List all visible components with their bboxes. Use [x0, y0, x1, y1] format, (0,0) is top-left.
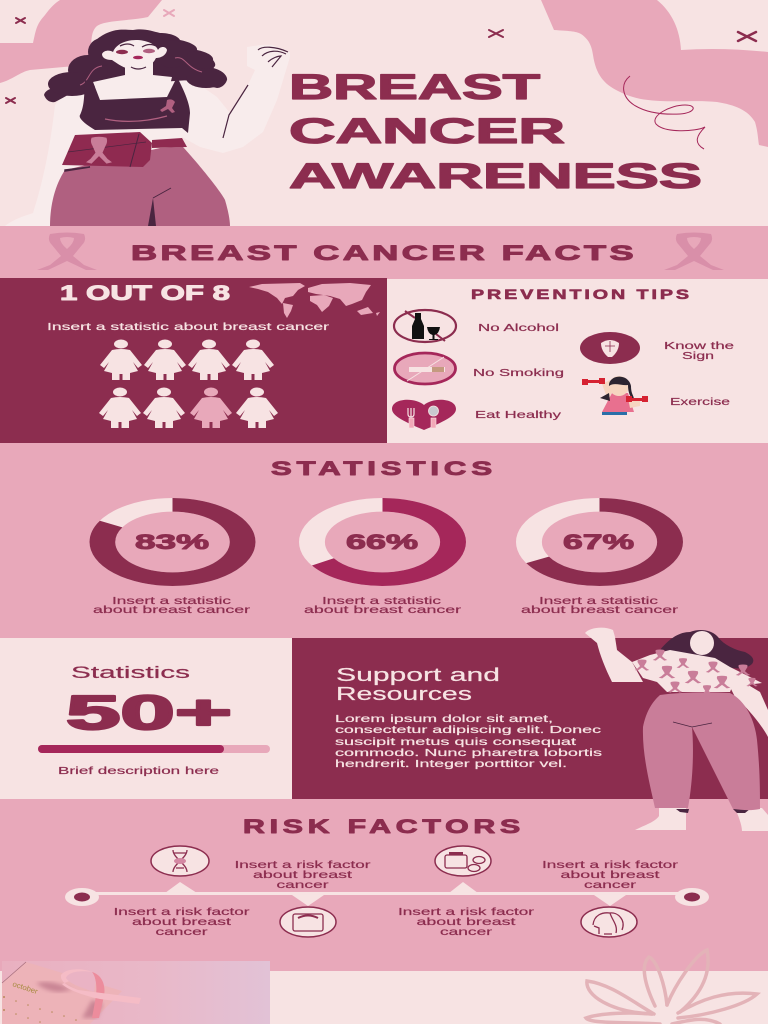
face — [690, 631, 714, 655]
icon: pills — [435, 846, 491, 876]
risk text 1 — [114, 906, 250, 938]
icon: scale — [280, 907, 336, 937]
caption: about breast cancer — [93, 604, 251, 616]
body — [5, 45, 290, 226]
risk text 1: Insert a risk factor — [114, 906, 250, 918]
tank top — [80, 77, 190, 133]
timeline — [65, 882, 709, 906]
label: Eat Healthy — [475, 409, 562, 421]
heading: Support and — [336, 665, 500, 685]
footer background — [0, 971, 768, 1024]
heading: 1 out of 8: 1 OUT OF 8 — [60, 282, 230, 305]
label: Sign — [682, 350, 714, 362]
risk text 2: about breast — [253, 869, 352, 881]
feet — [635, 808, 686, 830]
description: Brief description here — [58, 765, 219, 777]
body text: consectetur adipiscing elit. Donec — [335, 724, 601, 736]
caption: about breast cancer — [521, 604, 679, 616]
risk text 3: cancer — [440, 926, 493, 938]
panel: risk factors — [0, 799, 768, 971]
body text: hendrerit. Integer porttitor vel. — [335, 758, 567, 770]
trouser crease — [65, 167, 171, 226]
decorative wave: top right — [541, 0, 768, 147]
hair — [660, 630, 753, 668]
risk text 3 — [398, 906, 535, 938]
label: No Smoking — [473, 367, 564, 379]
caption — [93, 595, 251, 616]
heading: statistics: STATISTICS — [271, 459, 497, 480]
icon: healthy heart — [392, 400, 456, 430]
title: AWARENESS — [289, 157, 702, 196]
label: No Alcohol — [478, 322, 559, 334]
label — [664, 340, 734, 362]
heading: risk factors: RISK FACTORS — [243, 817, 525, 838]
right arm — [730, 683, 768, 737]
body text: commodo. Nunc pharetra lobortis — [335, 747, 602, 759]
icon: dna — [151, 846, 209, 876]
donut: 66%: 66% — [346, 531, 419, 554]
label: Exercise — [670, 396, 730, 408]
raised arm — [585, 628, 643, 682]
panel: facts banner — [0, 226, 768, 278]
caption: Insert a statistic — [539, 595, 658, 607]
trousers — [50, 147, 230, 226]
progress bar — [38, 745, 270, 753]
caption: Insert a statistic — [322, 595, 441, 607]
heading — [336, 665, 500, 704]
title: CANCER — [289, 112, 565, 151]
panel: support and resources — [292, 638, 768, 799]
caption — [521, 595, 679, 616]
heading: facts: BREAST CANCER FACTS — [131, 242, 637, 265]
risk text 4: cancer — [584, 879, 637, 891]
donut: 83% — [102, 505, 243, 579]
icon: no alcohol — [394, 310, 456, 342]
illustration: woman raising fist — [5, 29, 290, 226]
fist lines — [258, 47, 288, 67]
heading: Resources — [336, 684, 472, 704]
risk text 1: cancer — [156, 926, 208, 938]
belt — [152, 138, 187, 148]
pictogram: eight women — [99, 340, 278, 428]
ribbon shirt — [632, 650, 762, 695]
hair curl accents — [80, 58, 202, 85]
panel: prevention tips — [385, 278, 768, 443]
world map — [249, 283, 380, 318]
waist bag — [62, 132, 152, 167]
donut: 83%: 83% — [135, 531, 210, 554]
donut: 67% — [529, 505, 670, 579]
panel: 1 out of 8 — [0, 278, 385, 443]
photo: ribbon on calendar: october — [11, 979, 39, 996]
risk text 4: Insert a risk factor — [542, 859, 679, 871]
label: statistics: Statistics — [71, 663, 190, 682]
decorative wave: top left — [0, 0, 162, 83]
top ribbon and hem — [105, 99, 175, 121]
donut: 66% — [312, 505, 453, 579]
icon: ribbon left — [37, 232, 97, 270]
panel: 50+ statistic — [0, 638, 292, 799]
decorative squiggle — [624, 76, 705, 149]
body text: Lorem ipsum dolor sit amet, — [335, 713, 553, 725]
title — [289, 68, 702, 196]
neck and chest — [93, 62, 172, 100]
risk text 1: about breast — [132, 916, 231, 928]
risk text 4 — [542, 859, 679, 891]
risk text 2 — [234, 859, 371, 891]
title: BREAST — [289, 68, 540, 107]
trousers — [643, 692, 760, 810]
risk text 4: about breast — [560, 869, 660, 881]
icon: no smoking — [394, 353, 456, 384]
label: Know the — [664, 340, 734, 352]
face — [102, 40, 167, 70]
illustration: woman in ribbon shirt — [585, 628, 768, 831]
decorative stars — [6, 10, 756, 103]
statistic caption: Insert a statistic about breast cancer — [47, 321, 330, 333]
donut: 67%: 67% — [563, 531, 635, 554]
body text — [335, 713, 602, 770]
risk text 3: Insert a risk factor — [398, 906, 535, 918]
panel: statistics — [0, 443, 768, 638]
heading: prevention tips: PREVENTION TIPS — [471, 287, 692, 302]
icon: exercise girl — [582, 376, 648, 415]
arm crease — [223, 85, 248, 138]
photo: ribbon on calendar — [2, 961, 270, 1024]
icon: head profile — [581, 907, 637, 937]
trouser crease — [673, 722, 712, 727]
caption: Insert a statistic — [112, 595, 231, 607]
big number: 50+ — [66, 687, 232, 740]
risk text 3: about breast — [416, 916, 516, 928]
risk text 2: cancer — [276, 879, 329, 891]
body text: suscipit metus quis consequat — [335, 736, 576, 748]
decorative flower — [586, 950, 757, 1024]
icon: ribbon right — [664, 232, 724, 270]
icon: know the sign — [580, 332, 640, 364]
hair — [44, 29, 227, 102]
panel: header background — [0, 0, 768, 226]
caption — [304, 595, 462, 616]
risk text 2: Insert a risk factor — [234, 859, 371, 871]
caption: about breast cancer — [304, 604, 462, 616]
